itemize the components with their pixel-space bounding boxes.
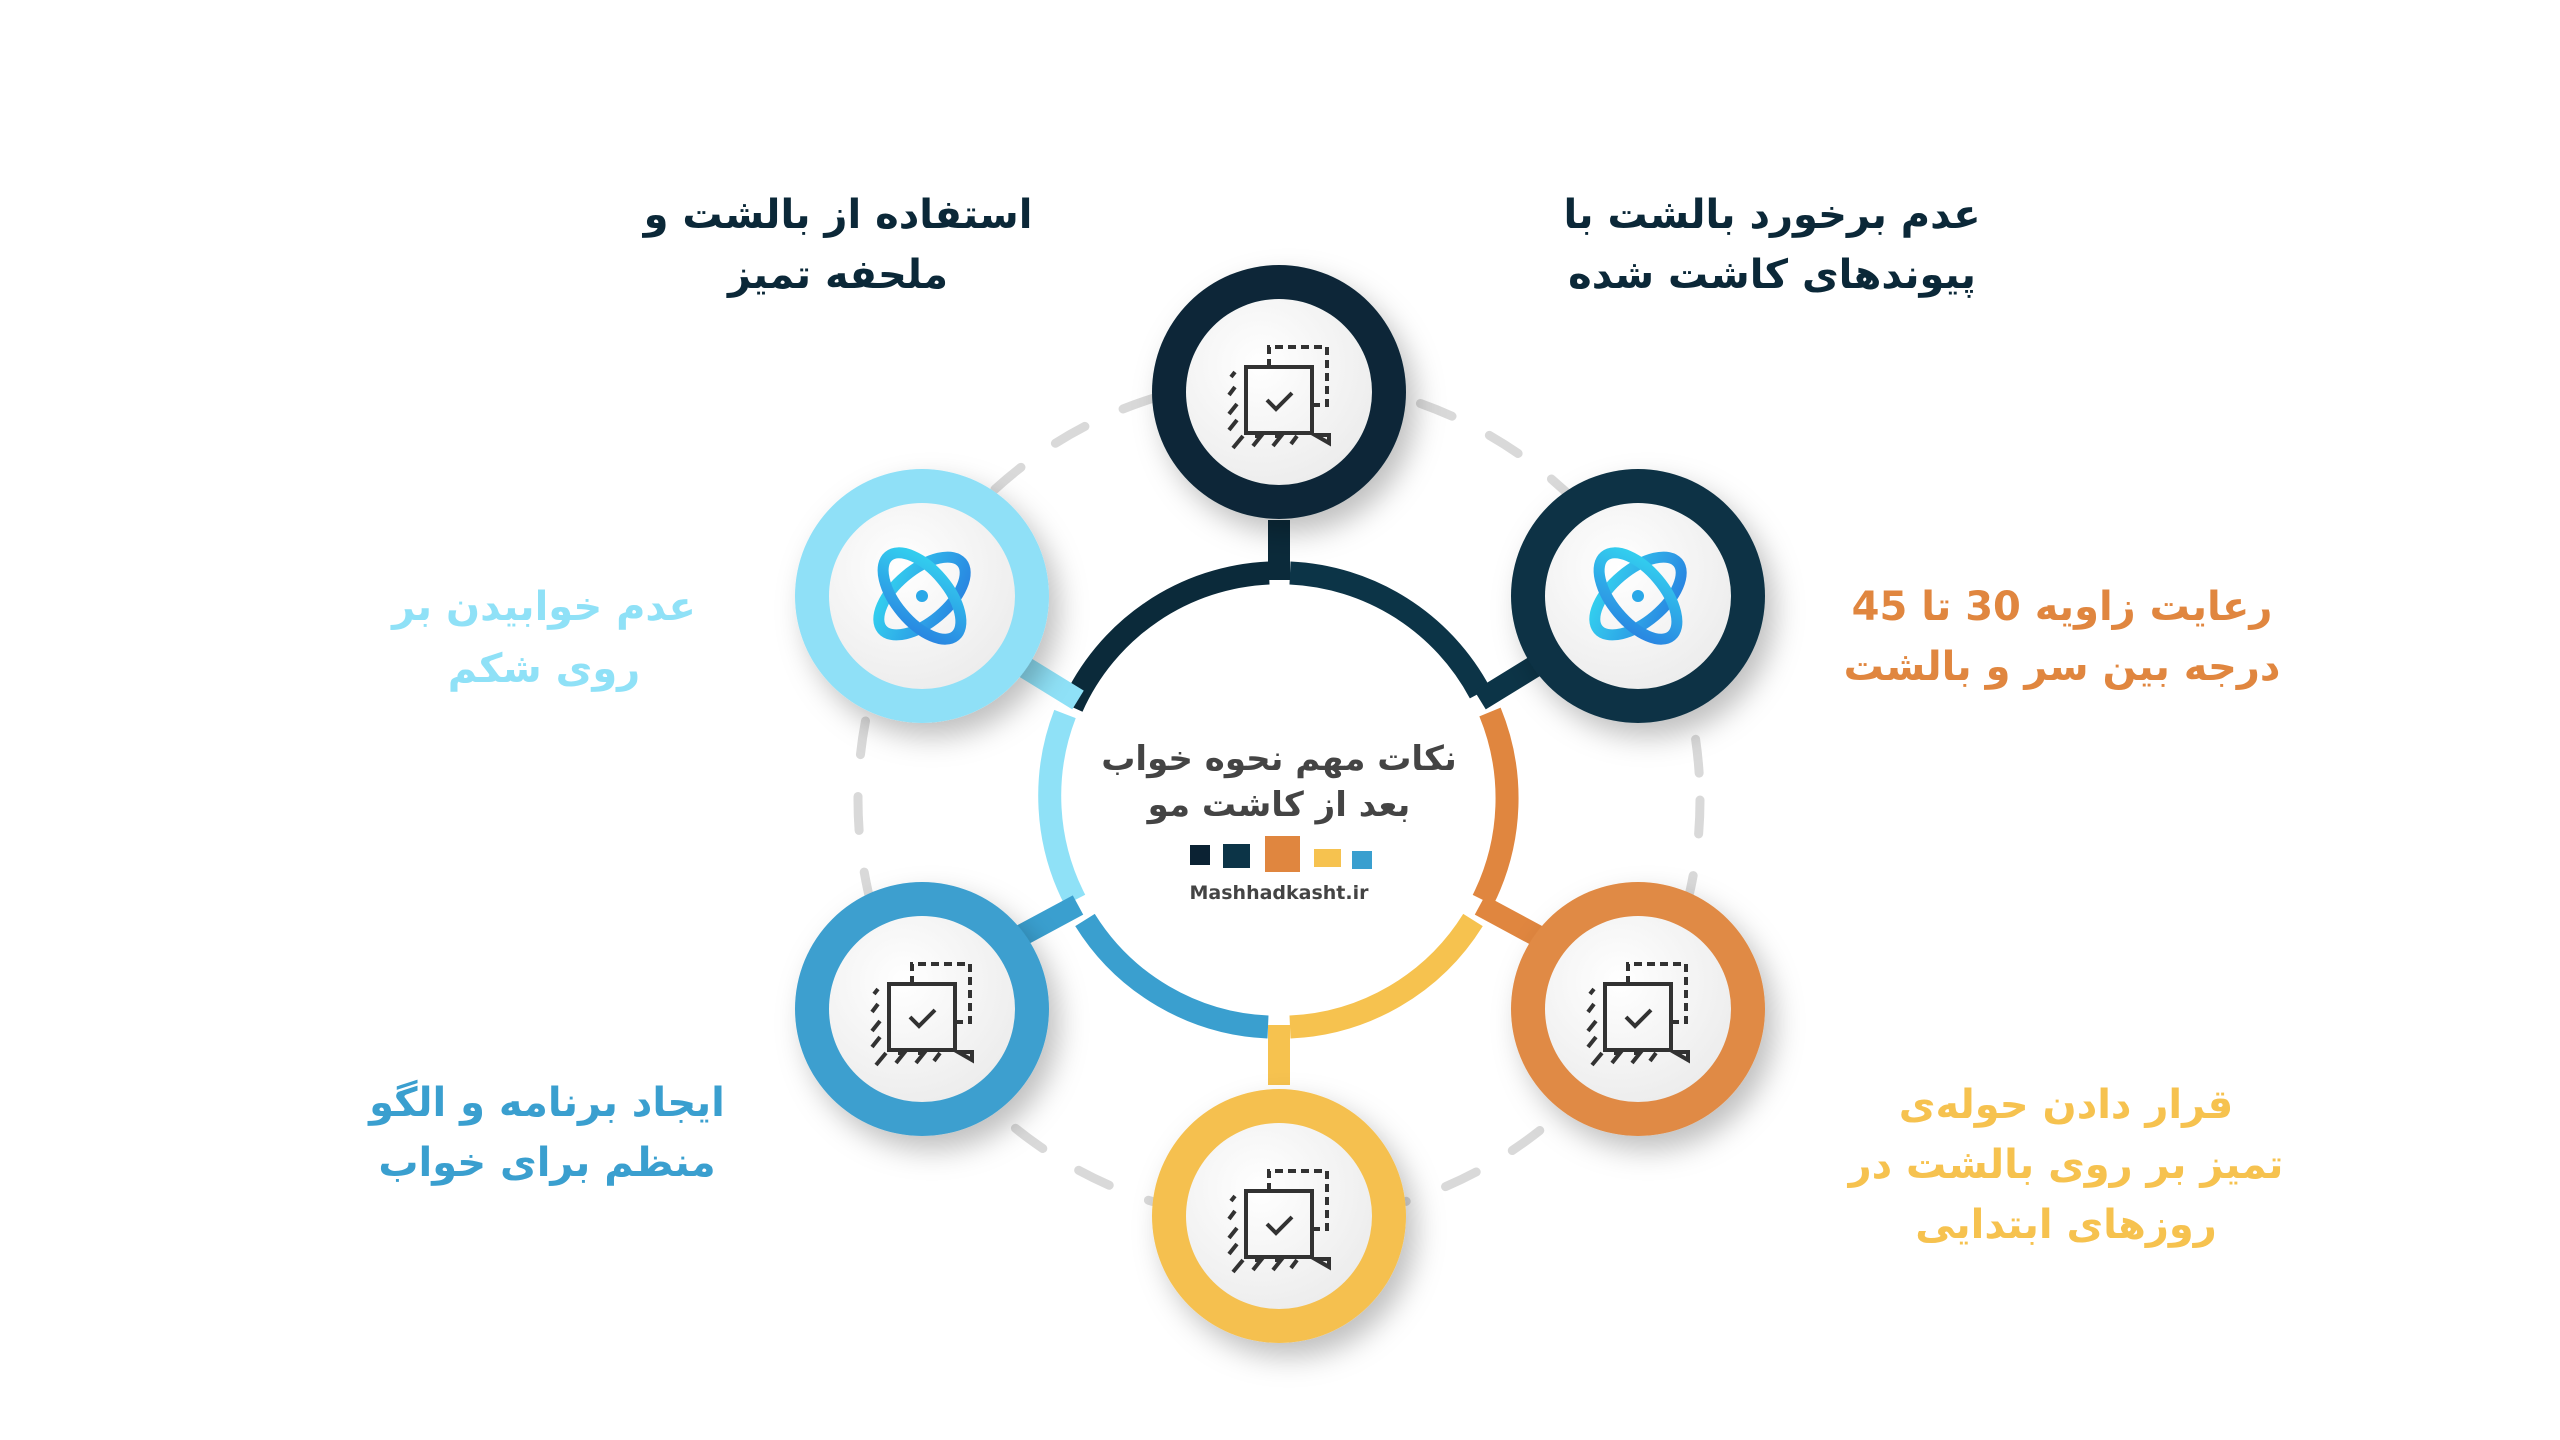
text: top-right (1563, 192, 1981, 298)
node: bottom-left (795, 882, 1049, 1136)
text: top-left: ملحفه تمیز (726, 252, 948, 298)
node: bottom (1152, 1089, 1406, 1343)
text: top-right: عدم برخورد بالشت با (1563, 192, 1981, 238)
connectors (1013, 520, 1545, 1085)
text: bottom-right: تمیز بر روی بالشت در (1847, 1142, 2283, 1188)
text: bottom-right: قرار دادن حوله‌ی (1899, 1082, 2233, 1128)
text: bottom-left (367, 1079, 725, 1186)
central ring (1050, 573, 1507, 1027)
text: top-left: استفاده از بالشت و (642, 192, 1032, 238)
node: top-left (795, 469, 1049, 723)
text: left: روی شکم (448, 646, 640, 692)
center: title block: نکات مهم نحوه خواب (1101, 739, 1457, 779)
text: bottom-left: ایجاد برنامه و الگو (367, 1079, 725, 1126)
center: title block (1066, 587, 1492, 1013)
node: top-right (1511, 469, 1765, 723)
node: bottom-right (1511, 882, 1765, 1136)
text: right: رعایت زاویه 30 تا 45 (1852, 584, 2272, 630)
dashed outer ring (858, 379, 1700, 1221)
node: top (1152, 265, 1406, 519)
text: top-left (642, 192, 1032, 298)
text: bottom-left: منظم برای خواب (378, 1140, 716, 1186)
text: bottom-right (1847, 1082, 2283, 1248)
text: right: درجه بین سر و بالشت (1844, 644, 2280, 690)
text: bottom-right: روزهای ابتدایی (1915, 1202, 2217, 1248)
text: right (1844, 584, 2280, 690)
center: title block: Mashhadkasht.ir (1190, 882, 1369, 904)
text: left: عدم خوابیدن بر (390, 584, 696, 630)
text: left (390, 584, 696, 692)
center: title block: بعد از کاشت مو (1146, 785, 1410, 825)
text: top-right: پیوندهای کاشت شده (1568, 252, 1976, 298)
